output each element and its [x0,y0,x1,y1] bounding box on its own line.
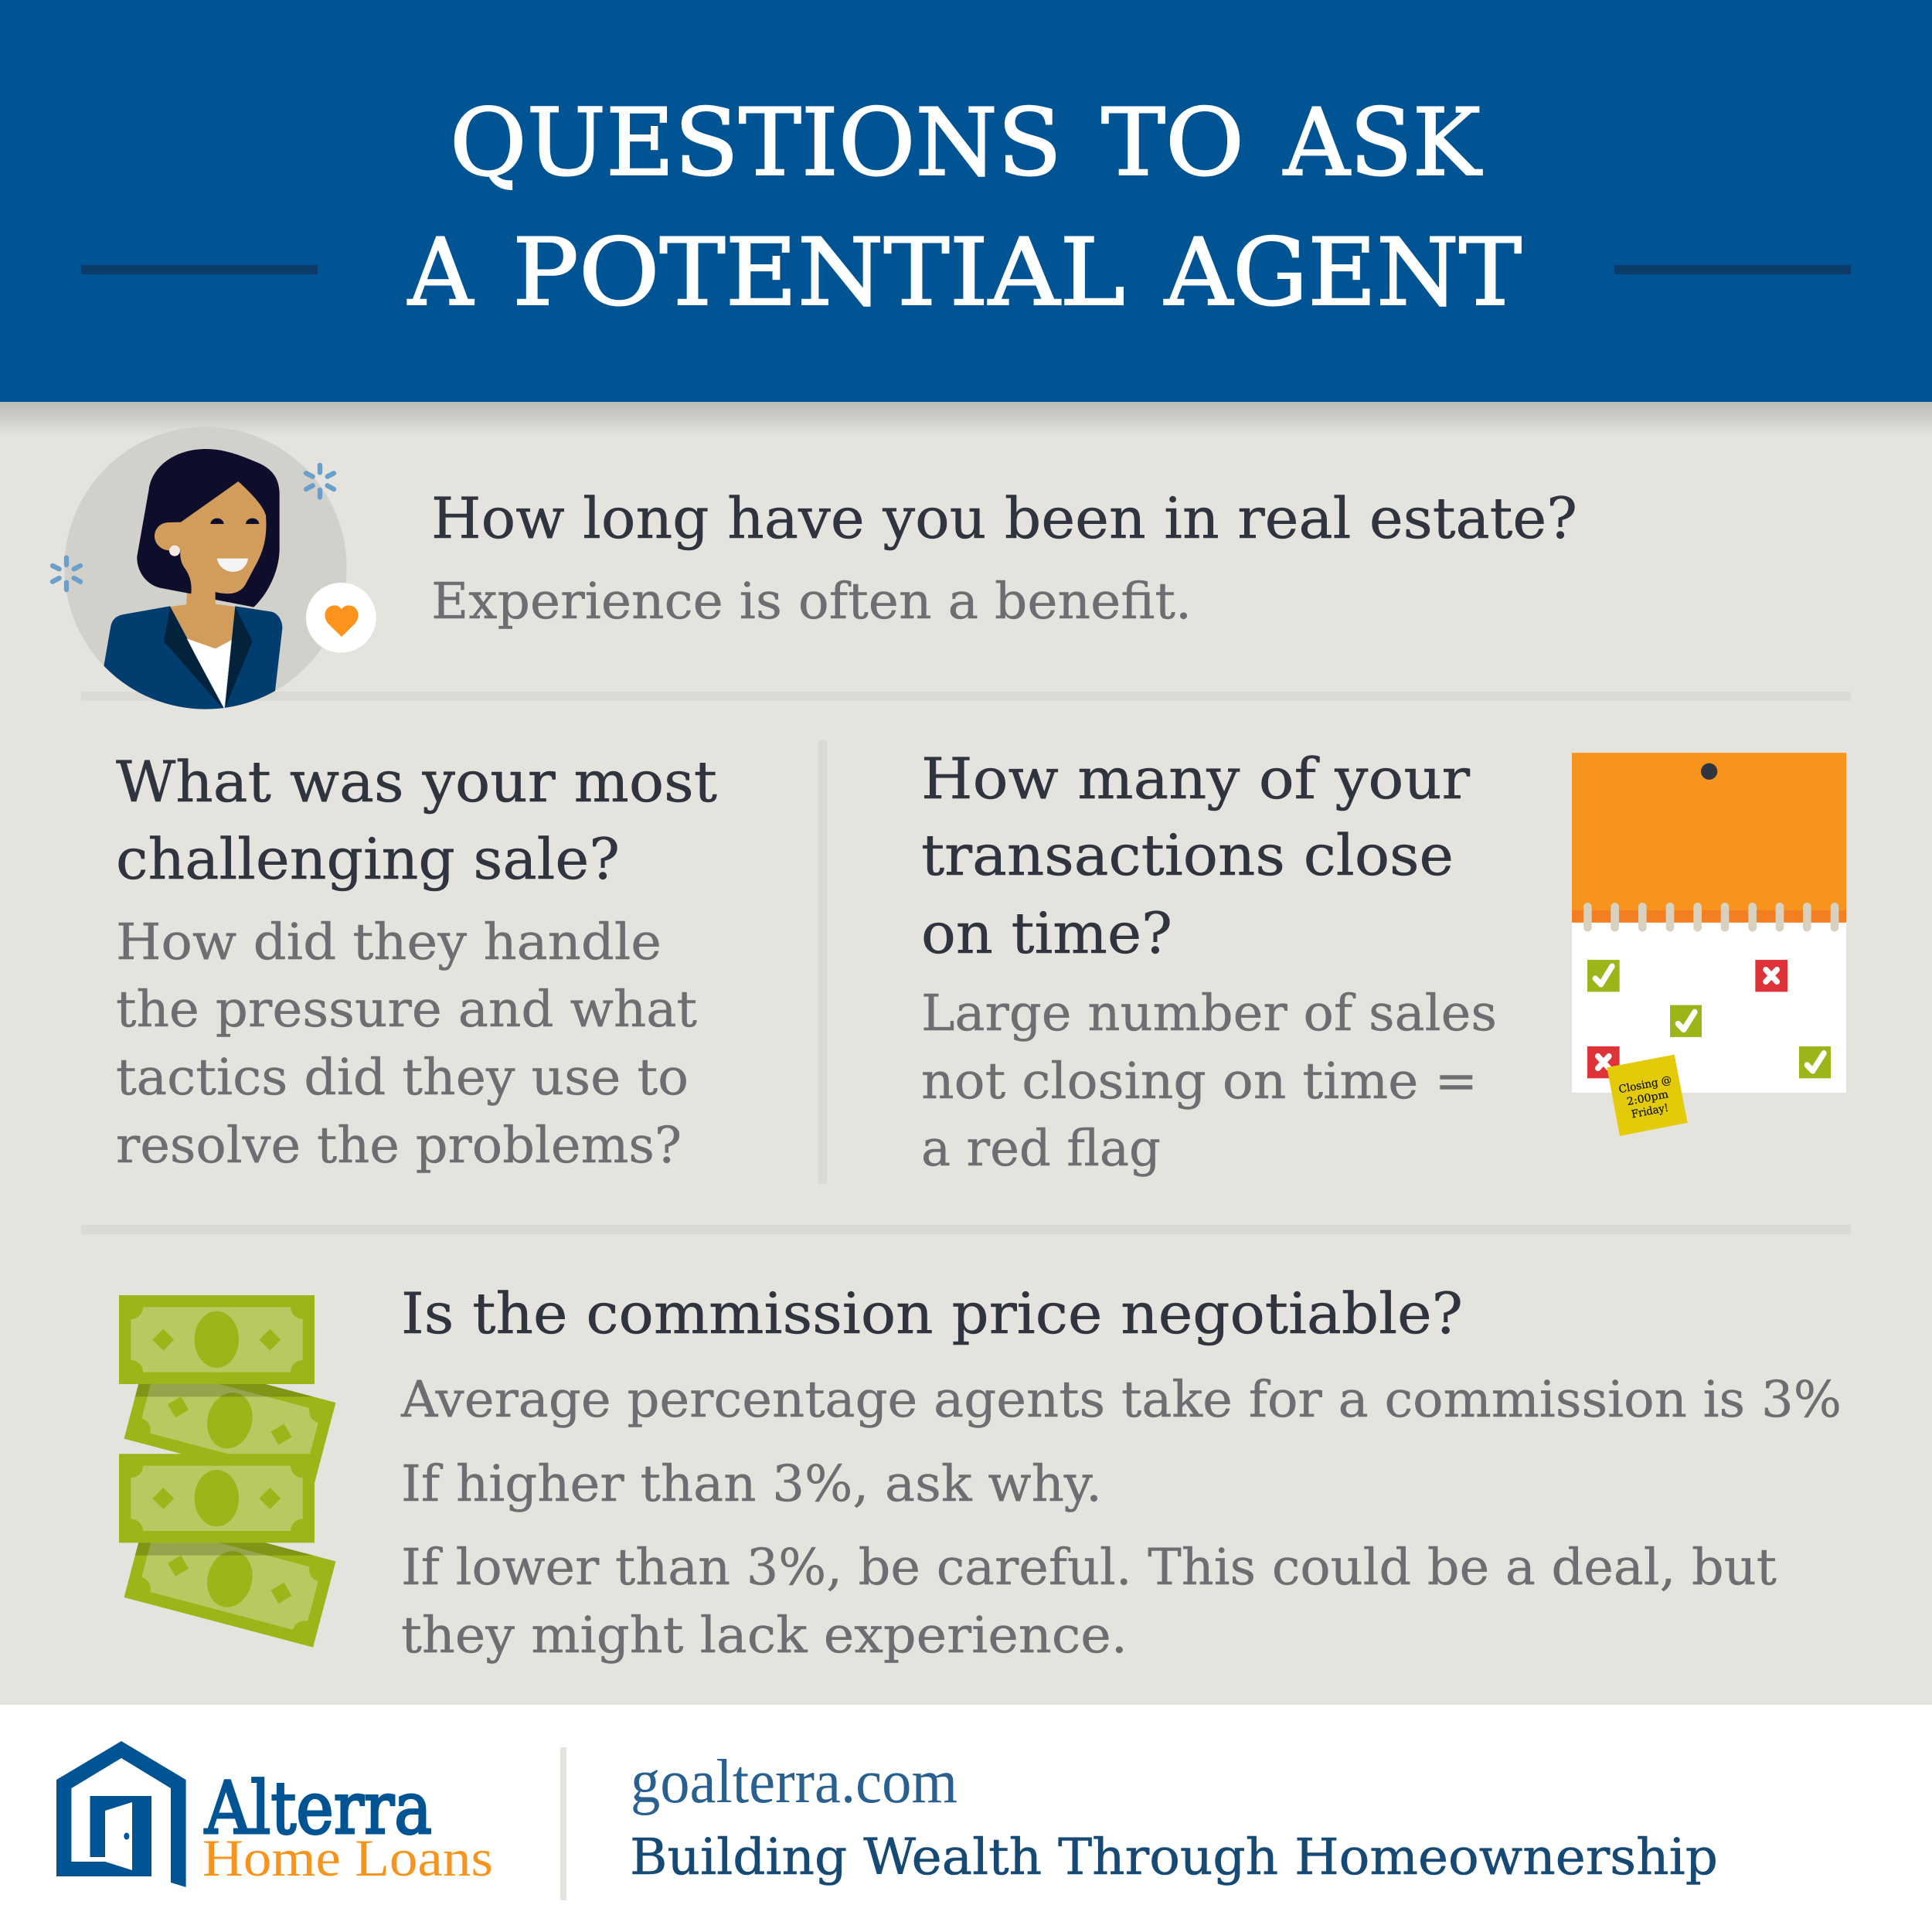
question: challenging sale: resolve the problems? [116,1117,682,1175]
question: commission [400,1281,1842,1665]
question: challenging sale: How did they handle [116,913,662,971]
title: TO [1101,90,1244,197]
question: closing on time: on time? [921,901,1172,967]
question: commission: If lower than 3%, be careful. This could be a deal, but [401,1539,1777,1597]
icon: calendar with sticky note: Friday! [1631,1102,1669,1121]
question: challenging sale: the pressure and what [116,981,697,1039]
title: A [407,219,474,327]
question: commission: Is the commission price negotiable? [401,1281,1463,1347]
question: commission: Average percentage agents take for a commission is 3% [400,1371,1842,1429]
dividers [81,692,1851,1234]
question: closing on time [921,747,1497,1178]
question: closing on time: a red flag [921,1120,1161,1178]
icon: calendar with sticky note [1572,753,1846,1136]
question: experience [431,486,1577,631]
title [407,90,1522,327]
logo: Alterra Home Loans: Home Loans [202,1828,493,1887]
website url: goalterra.com [631,1748,957,1816]
title: AGENT [1164,219,1522,327]
icon: calendar with sticky note: Closing @ [1617,1073,1672,1096]
logo: Alterra Home Loans: Alterra [204,1767,432,1851]
question: closing on time: transactions close [921,823,1454,889]
icon: calendar with sticky note: 2:00pm [1626,1088,1669,1108]
question: challenging sale: tactics did they use to [116,1049,689,1107]
question: closing on time: How many of your [921,747,1470,812]
question: challenging sale [116,750,717,1175]
question: experience: How long have you been in real estate? [431,486,1577,552]
logo: Alterra Home Loans [56,1741,493,1887]
question: commission: If higher than 3%, ask why. [401,1455,1102,1513]
icon: smiling agent portrait [53,427,376,736]
title: POTENTIAL [512,219,1125,327]
question: commission: they might lack experience. [401,1607,1128,1665]
icon: stack of dollar bills [116,1295,348,1648]
question: closing on time: Large number of sales [921,985,1497,1043]
tagline: Building Wealth Through Homeownership [630,1828,1718,1886]
footer band [0,1705,1932,1932]
title: QUESTIONS [450,90,1062,197]
header banner [0,0,1932,402]
title: ASK [1283,90,1482,197]
question: challenging sale: challenging sale? [116,827,620,893]
question: closing on time: not closing on time = [921,1053,1478,1111]
question: challenging sale: What was your most [116,750,717,815]
question: experience: Experience is often a benefit. [431,573,1192,631]
header shadow [0,402,1932,437]
